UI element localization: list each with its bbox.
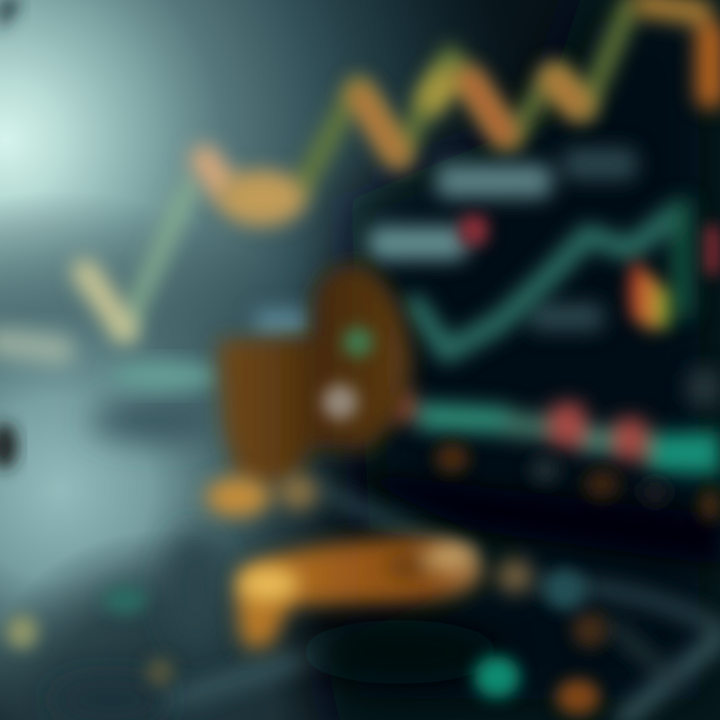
- red accents: [460, 215, 720, 275]
- lower line chart: teal zigzag: [415, 208, 682, 352]
- top left dark corner: [0, 0, 22, 32]
- candle: red yellow green: [628, 260, 671, 332]
- gold base: [238, 538, 533, 684]
- left edge dark object: [0, 423, 17, 469]
- grey labels: [254, 148, 720, 407]
- dark keyboard band: [340, 470, 720, 565]
- upper chart line: [125, 5, 630, 330]
- teal candle band: [390, 390, 720, 474]
- floor shadows: [50, 398, 225, 720]
- keys: orange dim dots: [435, 443, 720, 521]
- trophy stem: [206, 474, 318, 517]
- dark screen area: [320, 0, 720, 720]
- base shadow: [300, 620, 500, 684]
- background: grey teal lower left floor: [0, 190, 360, 720]
- base body: [238, 538, 533, 648]
- icon: gold trophy: [206, 264, 412, 517]
- horizon teal band: [110, 361, 220, 391]
- round coins: [6, 570, 608, 715]
- keyboard lines: [170, 490, 720, 718]
- background: lower left shade: [0, 530, 350, 720]
- chart peak: orange blob: [218, 170, 306, 226]
- trophy body: [218, 264, 412, 484]
- base highlight and shade: [238, 544, 476, 601]
- upper line chart: orange zigzag: [0, 4, 710, 350]
- trophy details: [322, 327, 373, 420]
